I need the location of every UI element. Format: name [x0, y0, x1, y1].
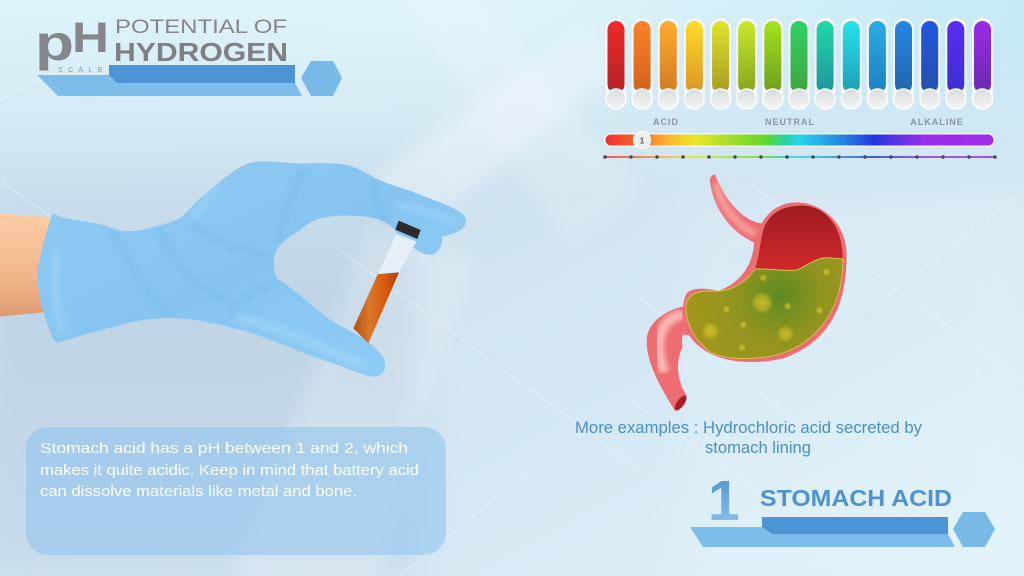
info panel: stomach acid description: [26, 427, 446, 555]
description text: [40, 440, 419, 500]
pH value number: 1: [708, 469, 740, 533]
tube 15: [972, 18, 993, 109]
slider knob: 1: [640, 136, 645, 146]
letter p: p: [35, 15, 74, 71]
neutral label: NEUTRAL: [765, 117, 815, 127]
hydrogen: HYDROGEN: [114, 37, 288, 67]
stomach cavity: [755, 206, 843, 270]
stomach wall: [647, 174, 847, 411]
tube 14: [945, 18, 966, 109]
scale labels: [653, 117, 964, 127]
gloved hand holding test tube: [0, 162, 466, 377]
glove: [38, 162, 466, 377]
title: pH potential of hydrogen: [35, 14, 342, 96]
tube 8: [788, 18, 810, 109]
title ribbon: dark band: [109, 65, 295, 83]
gastric acid: [686, 258, 843, 359]
tube 13: [919, 18, 940, 109]
result ribbon: dark band: [762, 517, 948, 534]
esophagus highlight: [716, 185, 753, 233]
description text: Stomach acid has a pH between 1 and 2, which: [40, 440, 408, 457]
more examples text: [575, 418, 922, 457]
test tube: [353, 221, 421, 343]
tube glass: [378, 233, 417, 273]
tube 9: [815, 18, 836, 109]
result heading: 1 stomach acid: [690, 469, 995, 547]
result hexagon: [953, 512, 995, 547]
duodenum highlight: [659, 315, 680, 368]
stomach illustration: [647, 174, 847, 412]
pH colour tubes: [606, 18, 993, 109]
tube cap: [395, 221, 421, 239]
result ribbon: light band: [690, 527, 955, 547]
tube 4: [684, 18, 705, 109]
letter H: H: [72, 14, 109, 62]
tube 10: [841, 18, 862, 109]
glove highlights: [55, 185, 457, 365]
rainbow pH slider: [604, 132, 995, 148]
tube 2: [632, 18, 653, 109]
description text: makes it quite acidic. Keep in mind that battery acid: [40, 462, 419, 479]
description text: can dissolve materials like metal and bone.: [40, 483, 357, 500]
tick scale: [603, 155, 997, 159]
tube 3: [658, 18, 679, 109]
potential of: POTENTIAL OF: [115, 16, 287, 38]
tube 1: [606, 18, 626, 109]
tube 12: [893, 18, 914, 109]
forearm: [0, 213, 57, 317]
tube 5: [710, 18, 731, 109]
tube 7: [762, 18, 783, 109]
slider knob: [634, 132, 650, 148]
scale label: SCALE: [58, 67, 108, 74]
tube liquid: [353, 272, 399, 343]
more examples text: stomach lining: [705, 438, 811, 457]
tube 11: [867, 18, 888, 109]
more examples text: More examples : Hydrochloric acid secreted by: [575, 418, 922, 437]
substance name: STOMACH ACID: [760, 485, 952, 511]
title hexagon: [301, 61, 342, 96]
alkaline label: ALKALINE: [910, 117, 964, 127]
glove folds: [113, 172, 388, 315]
tube 6: [736, 18, 757, 109]
duodenum opening: [673, 394, 689, 412]
acid bubbles: [701, 268, 830, 352]
title ribbon: light band: [37, 75, 302, 96]
acid label: ACID: [653, 117, 679, 127]
